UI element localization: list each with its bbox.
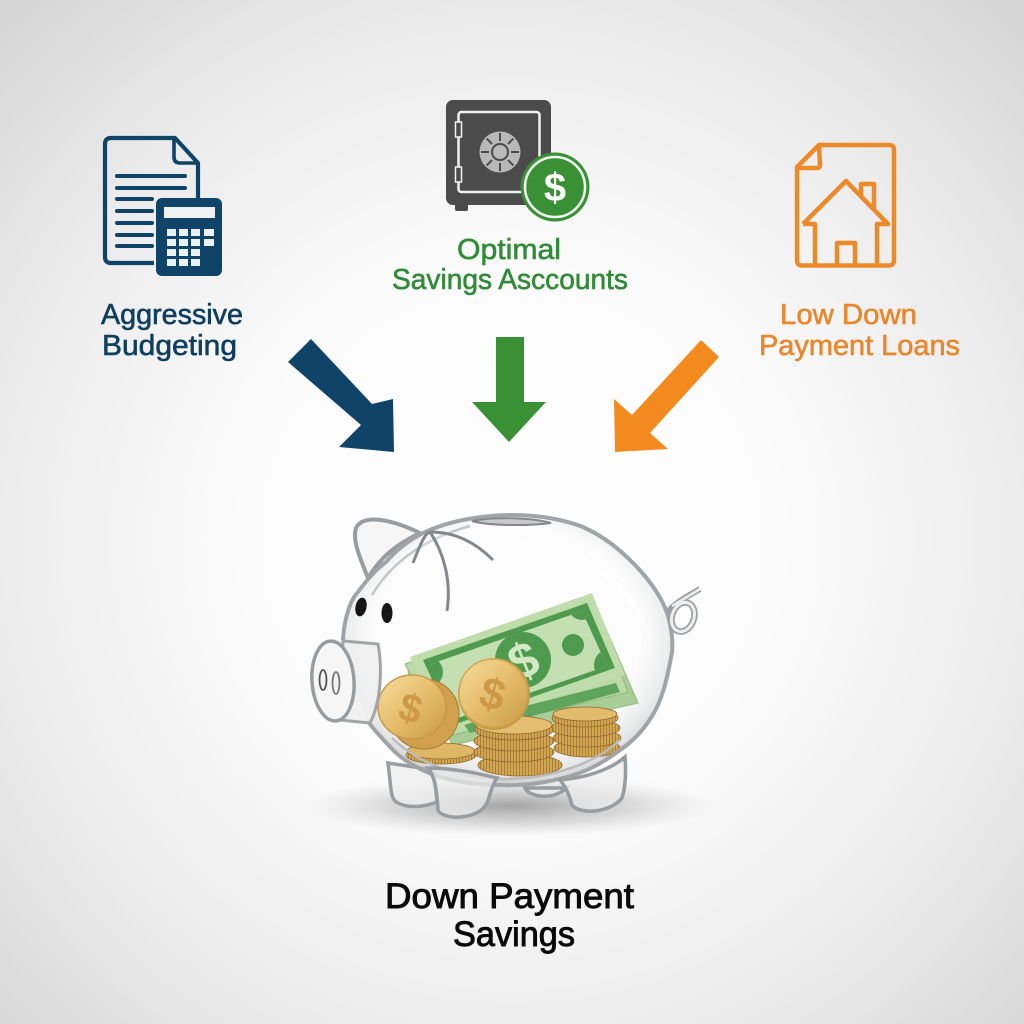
snout xyxy=(309,640,380,723)
label: Low Down Payment Loans: Payment Loans xyxy=(759,330,960,362)
middle banknote xyxy=(405,600,628,737)
label: Optimal Savings Accounts: Savings Asccounts xyxy=(392,264,628,296)
label: Aggressive Budgeting: Budgeting xyxy=(102,330,237,362)
arrow: orange xyxy=(614,340,719,452)
right gold coin xyxy=(458,658,530,730)
icon: safe with dollar badge: $ xyxy=(544,166,566,210)
arrow: navy xyxy=(288,339,394,452)
icon: safe with dollar badge xyxy=(446,100,590,222)
pig shadow xyxy=(305,776,715,836)
left gold coin: $ xyxy=(394,685,427,733)
dark strip between banknotes xyxy=(462,683,620,733)
glass outline xyxy=(343,515,672,785)
centre coin stack xyxy=(474,716,562,776)
label: Optimal Savings Accounts: Optimal xyxy=(457,234,561,266)
back ear xyxy=(355,520,420,578)
title: Down Payment Savings: Savings xyxy=(453,915,575,954)
arrow: green xyxy=(472,337,546,442)
right gold coin: $ xyxy=(474,668,511,721)
glass highlights xyxy=(503,543,650,640)
front ear xyxy=(413,532,493,611)
tail xyxy=(668,589,700,635)
label: Low Down Payment Loans: Low Down xyxy=(780,299,917,331)
label: Low Down Payment Loans xyxy=(759,299,960,362)
title: Down Payment Savings xyxy=(385,877,634,954)
right coin stack xyxy=(550,707,621,757)
icon: document with calculator xyxy=(105,138,222,276)
front banknote xyxy=(410,592,626,732)
title: Down Payment Savings: Down Payment xyxy=(385,877,634,916)
piggy body xyxy=(343,515,672,785)
back banknote xyxy=(408,608,638,745)
coin slot xyxy=(472,518,551,525)
label: Aggressive Budgeting xyxy=(101,299,243,362)
front banknote: $ xyxy=(500,630,547,692)
left gold coin xyxy=(378,675,459,749)
icon: document with house xyxy=(797,145,894,266)
back legs xyxy=(388,763,566,807)
eyes xyxy=(354,597,392,623)
piggy bank xyxy=(309,515,700,817)
front legs xyxy=(428,757,626,817)
label: Aggressive Budgeting: Aggressive xyxy=(101,299,243,331)
left base coins xyxy=(406,743,476,764)
label: Optimal Savings Accounts xyxy=(392,234,628,296)
